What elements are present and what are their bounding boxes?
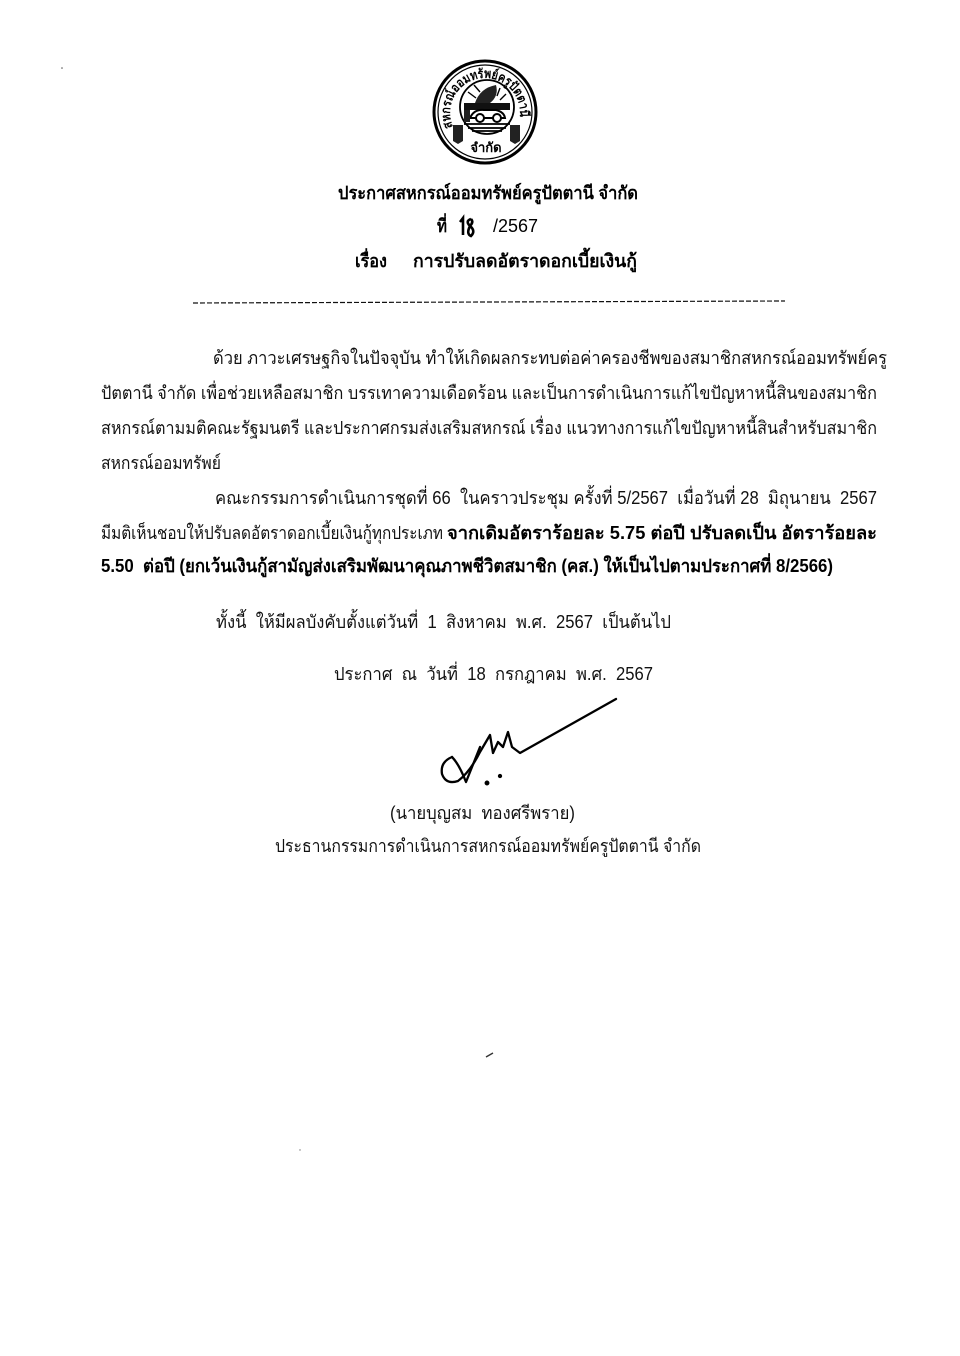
- paragraph: background: ปัตตานี จำกัด เพื่อช่วยเหลือสมาชิก บรรเทาความเดือดร้อน และเป็นการดำเนินการแก้ไขปัญหาหนี้สินของสมาชิก: [101, 380, 877, 403]
- icon: cooperative seal: [432, 60, 538, 164]
- signatory title: ประธานกรรมการดำเนินการสหกรณ์ออมทรัพย์ครูปัตตานี จำกัด: [275, 836, 701, 857]
- car and rails: [470, 110, 505, 118]
- paragraph: background: สหกรณ์ออมทรัพย์: [101, 453, 221, 473]
- icon: cooperative seal: จำกัด: [470, 140, 502, 155]
- announcement number: ที่: [437, 213, 447, 236]
- paragraph: resolution: 5.50 ต่อปี (ยกเว้นเงินกู้สามัญส่งเสริมพัฒนาคุณภาพชีวิตสมาชิก (คส.) ให้เป็นไปตามประกาศที่ 8/2566): [101, 553, 833, 578]
- paragraph: resolution: คณะกรรมการดำเนินการชุดที่ 66 ในคราวประชุม ครั้งที่ 5/2567 เมื่อวันที่ 28 มิถุนายน 2567: [215, 485, 877, 509]
- subject: การปรับลดอัตราดอกเบี้ยเงินกู้: [413, 247, 637, 273]
- paragraph: background: สหกรณ์ตามมติคณะรัฐมนตรี และประกาศกรมส่งเสริมสหกรณ์ เรื่อง แนวทางการแก้ไขปัญหาหนี้สินสำหรับสมาชิก: [101, 415, 877, 439]
- signature: [442, 699, 616, 784]
- paragraph: background: ด้วย ภาวะเศรษฐกิจในปัจจุบัน ทำให้เกิดผลกระทบต่อค่าครองชีพของสมาชิกสหกรณ์ออมทรัพย์ครู: [213, 347, 887, 369]
- icon: cooperative seal: สหกรณ์ออมทรัพย์ครูปัตตานี: [442, 67, 532, 129]
- subject: เรื่อง: [355, 248, 387, 271]
- announcement date: ประกาศ ณ วันที่ 18 กรกฎาคม พ.ศ. 2567: [334, 661, 653, 684]
- subject: [355, 247, 637, 273]
- paragraph: resolution: [101, 485, 877, 578]
- effective date: ทั้งนี้ ให้มีผลบังคับตั้งแต่วันที่ 1 สิงหาคม พ.ศ. 2567 เป็นต้นไป: [216, 609, 671, 632]
- paragraph: resolution: มีมติเห็นชอบให้ปรับลดอัตราดอกเบี้ยเงินกู้ทุกประเภท: [101, 520, 443, 544]
- side flags: [453, 125, 463, 144]
- title: ประกาศสหกรณ์ออมทรัพย์ครูปัตตานี จำกัด: [338, 182, 638, 205]
- paragraph: resolution: จากเดิมอัตราร้อยละ 5.75 ต่อปี ปรับลดเป็น อัตราร้อยละ: [447, 521, 877, 543]
- announcement number: [437, 213, 538, 236]
- signatory name: (นายบุญสม ทองศรีพราย): [390, 803, 575, 824]
- mountain and rays: [475, 85, 497, 103]
- paragraph: background: [101, 347, 887, 473]
- announcement number: /2567: [493, 216, 538, 236]
